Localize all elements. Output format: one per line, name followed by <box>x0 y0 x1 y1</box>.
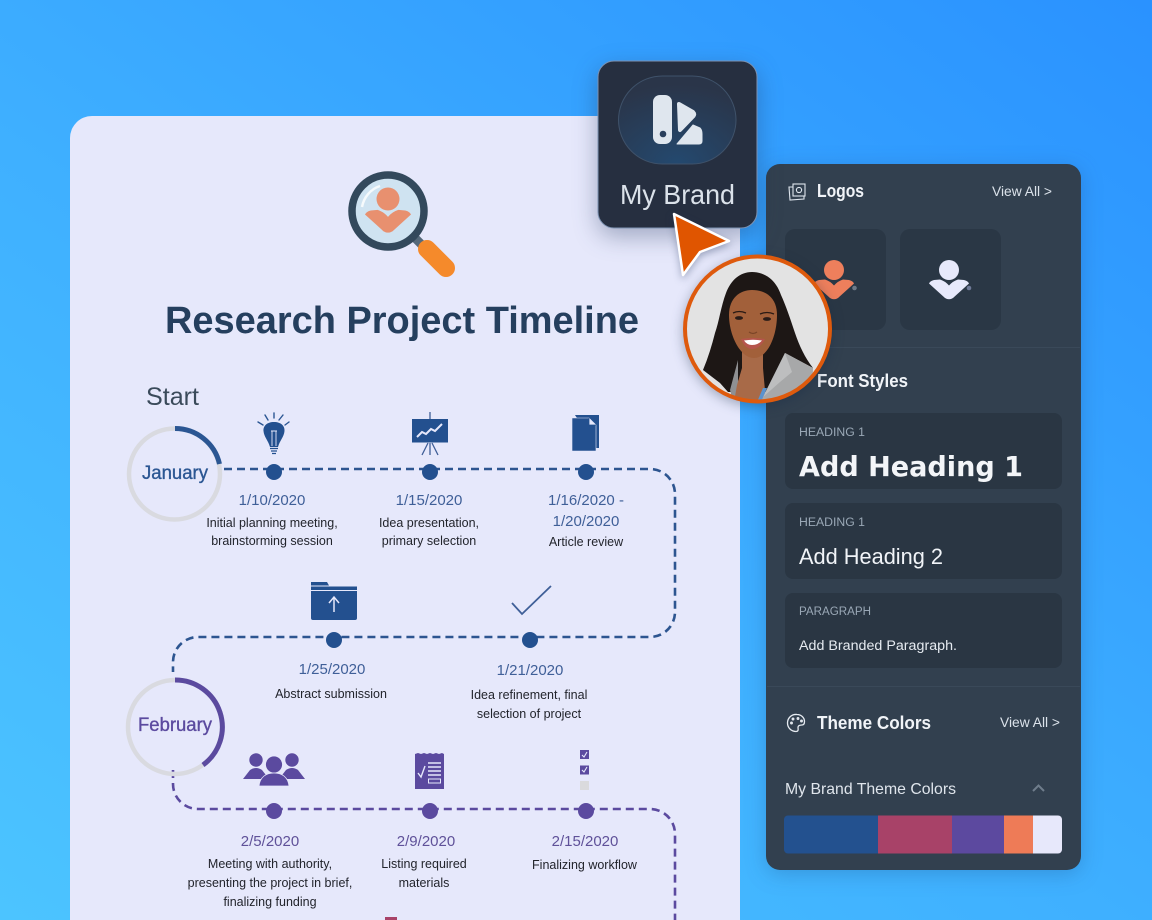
text: milestone 1/21/2020: Idea refinement, final <box>471 688 587 702</box>
text: milestone 2/5/2020: 2/5/2020 <box>241 833 299 850</box>
card: heading 2: HEADING 1 <box>799 517 865 529</box>
card: paragraph <box>785 593 1062 668</box>
text: milestone 1/16/2020 <box>548 492 624 549</box>
text: milestone 1/21/2020: 1/21/2020 <box>497 662 563 679</box>
icon: magnifying glass logo <box>352 175 446 268</box>
text: milestone 1/10/2020: brainstorming session <box>211 534 333 548</box>
card: heading 2: Add Heading 2 <box>799 544 943 569</box>
timeline path: february <box>173 770 675 920</box>
heading: logos: Logos <box>817 181 864 201</box>
text: milestone 2/9/2020 <box>381 833 467 890</box>
text: milestone 1/15/2020 <box>379 492 479 548</box>
text: milestone 1/10/2020: 1/10/2020 <box>239 492 305 509</box>
icon: brand pill <box>618 76 736 164</box>
icon: notepad checklist <box>415 753 444 789</box>
label: my brand: My Brand <box>620 179 735 210</box>
text: milestone 2/9/2020: materials <box>399 876 449 890</box>
text: milestone 2/5/2020: Meeting with authority, <box>208 857 332 871</box>
text: milestone 1/21/2020 <box>471 662 587 721</box>
icon: light bulb <box>258 413 289 454</box>
text: milestone 2/5/2020: presenting the project in brief, <box>188 876 352 890</box>
card: paragraph: PARAGRAPH <box>799 606 871 618</box>
timeline path: january <box>173 469 675 672</box>
text: milestone 1/15/2020: Idea presentation, <box>379 516 479 530</box>
label: my brand theme colors: My Brand Theme Colors <box>785 781 956 798</box>
card: heading 1: Add Heading 1 <box>799 450 1023 483</box>
month ring: February: February <box>138 715 212 736</box>
blazer right <box>762 353 813 400</box>
blazer left <box>730 360 738 396</box>
text: milestone 1/21/2020: selection of project <box>477 707 582 721</box>
blouse <box>758 388 767 400</box>
hair <box>703 272 813 392</box>
panel: document <box>70 116 740 920</box>
heading: font styles: Font Styles <box>817 371 908 391</box>
text: milestone 2/9/2020: Listing required <box>381 857 467 871</box>
text: milestone 2/15/2020: Finalizing workflow <box>532 858 638 872</box>
text: milestone 2/15/2020: 2/15/2020 <box>552 833 618 850</box>
month ring: February <box>128 680 222 774</box>
section: font styles <box>785 371 1062 668</box>
text: milestone 1/25/2020 <box>275 661 387 701</box>
face <box>729 290 777 358</box>
text: milestone 1/16/2020: 1/16/2020 - <box>548 492 624 509</box>
section: theme colors <box>784 713 1062 854</box>
smile <box>741 338 765 349</box>
logo card: orange <box>785 229 886 330</box>
cursor arrow <box>674 214 729 275</box>
icon: palette <box>788 714 804 732</box>
icon: group of people <box>243 753 305 786</box>
nose <box>749 332 757 334</box>
card: heading 1: HEADING 1 <box>799 427 865 439</box>
text: milestone 1/25/2020: 1/25/2020 <box>299 661 365 678</box>
text: milestone 1/10/2020 <box>206 492 338 548</box>
text: milestone 1/16/2020: Article review <box>549 535 624 549</box>
color swatches <box>784 816 1062 854</box>
text: milestone 2/9/2020: 2/9/2020 <box>397 833 455 850</box>
text: milestone 2/5/2020 <box>188 833 352 909</box>
neck and chest <box>735 352 766 400</box>
text: milestone 2/5/2020: finalizing funding <box>223 895 317 909</box>
heading: theme colors: Theme Colors <box>817 713 931 733</box>
text: milestone 1/25/2020: Abstract submission <box>275 687 387 701</box>
section: logos <box>785 181 1052 330</box>
panel: brand kit sidebar <box>766 164 1081 870</box>
my brand tile <box>598 61 757 228</box>
avatar portrait <box>685 256 830 403</box>
card: heading 1 <box>785 413 1062 489</box>
icon: check mark <box>512 586 551 614</box>
month ring: January: January <box>142 463 208 484</box>
text: milestone 1/15/2020: 1/15/2020 <box>396 492 462 509</box>
link: view all logos: View All > <box>992 183 1052 199</box>
icon: cropped next milestone <box>385 917 397 920</box>
text: milestone 2/15/2020 <box>532 833 638 872</box>
link: view all colors: View All > <box>1000 714 1060 730</box>
icon: upload folder <box>311 582 357 620</box>
icon: presentation board <box>412 412 448 455</box>
milestone dots <box>266 464 594 819</box>
icon: chevron <box>1033 786 1044 791</box>
title: Research Project Timeline <box>165 300 639 342</box>
start label: Start <box>146 383 199 411</box>
card: paragraph: Add Branded Paragraph. <box>799 638 957 653</box>
icon: checklist boxes <box>580 750 589 790</box>
icon: documents <box>572 415 599 451</box>
card: heading 2 <box>785 503 1062 579</box>
month ring: January <box>129 428 220 520</box>
text: milestone 1/16/2020: 1/20/2020 <box>553 513 619 530</box>
eyebrows and eyes <box>733 312 774 314</box>
logo card: white <box>900 229 1001 330</box>
text: milestone 1/15/2020: primary selection <box>382 534 476 548</box>
text: milestone 1/10/2020: Initial planning meeting, <box>206 516 338 530</box>
icon: logos <box>789 184 805 200</box>
